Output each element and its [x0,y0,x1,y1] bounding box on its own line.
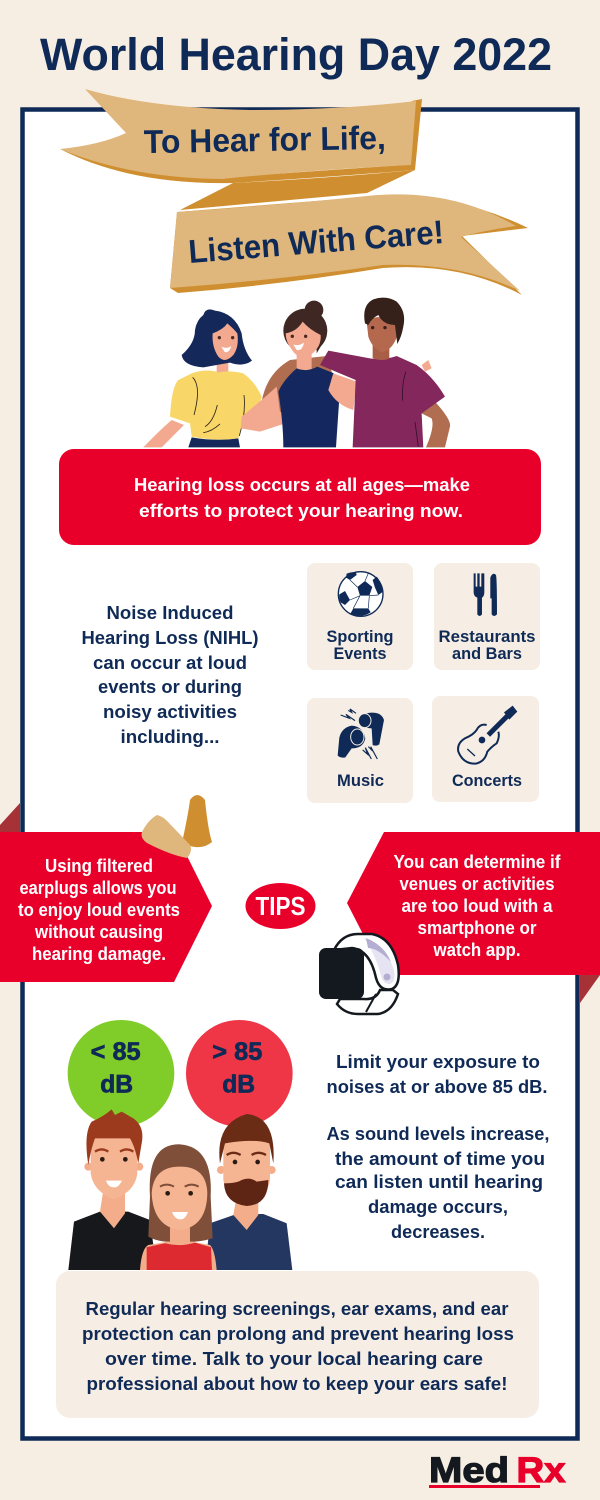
icon: earbuds [338,709,384,759]
bottom advice panel: professional about how to keep your ears safe! [86,1374,508,1394]
badge: over 85 dB [186,1020,293,1127]
ribbon banner [60,89,528,295]
right tip panel: are too loud with a [402,896,553,916]
red message banner: Hearing loss occurs at all ages—make [134,475,470,495]
person: right man [205,1114,292,1270]
text: limit exposure: can listen until hearing [335,1172,543,1192]
person: left man [68,1109,157,1270]
text: limit exposure: damage occurs, [368,1197,508,1217]
card: sporting events [307,563,413,670]
label: Sporting [326,628,394,646]
red message banner [59,449,541,545]
card: restaurants and bars [434,563,540,670]
bottom advice panel [56,1271,539,1418]
icon: soccer ball [338,572,383,616]
left tip panel: without causing [34,922,163,942]
left tip panel: Using filtered [45,856,153,876]
text: limit exposure: noises at or above 85 dB. [326,1077,548,1097]
icon: guitar [458,706,517,764]
right tip panel: watch app. [433,940,520,960]
NIHL text block: Noise Induced [106,603,234,623]
left tip panel [0,832,212,982]
badge: over 85 dB: dB [222,1071,255,1098]
illustration: three friends [143,298,450,447]
right tip panel: You can determine if [394,852,561,872]
title: World Hearing Day 2022 [40,29,552,80]
text: limit exposure: the amount of time you [335,1149,545,1169]
red message banner: efforts to protect your hearing now. [139,501,463,521]
tips badge: TIPS [256,891,306,921]
badge: under 85 dB: dB [100,1071,133,1098]
text: limit exposure: Limit your exposure to [336,1052,540,1072]
left tip panel: hearing damage. [32,944,166,964]
right tip panel: venues or activities [400,874,554,894]
icon: smartwatch [319,934,399,1014]
card: sporting events: Events [334,645,386,663]
ribbon text line 2: Listen With Care! [187,213,445,270]
badge: over 85 dB: > 85 [212,1039,263,1066]
tips badge [246,883,316,929]
logo: MedRx [429,1451,566,1490]
left tip panel: to enjoy loud events [18,900,180,920]
dark red ribbon folds [0,803,600,1003]
text: limit exposure: As sound levels increase, [326,1124,550,1144]
badge: under 85 dB: < 85 [91,1039,141,1066]
bottom advice panel: protection can prolong and prevent hearing loss [82,1324,514,1344]
NIHL text block: Hearing Loss (NIHL) [82,628,259,648]
text: limit exposure [326,1052,550,1242]
sound level illustration: three people [68,1020,293,1270]
card: music [307,698,413,803]
bottom advice panel: Regular hearing screenings, ear exams, and ear [86,1299,508,1319]
right tip panel: smartphone or [418,918,536,938]
ribbon text line 1: To Hear for Life, [143,119,386,160]
NIHL text block: events or during [98,677,242,697]
label: Music [337,772,384,790]
label: Restaurants [438,628,536,646]
logo: MedRx: Med [429,1451,509,1490]
NIHL text block [82,603,259,747]
right tip panel [347,832,600,975]
left tip panel: earplugs allows you [20,878,176,898]
NIHL text block: can occur at loud [93,653,247,673]
text: limit exposure: decreases. [391,1222,485,1242]
person: centre woman [140,1144,217,1270]
label: Concerts [452,772,522,790]
icon: fork and knife [474,573,497,616]
logo: MedRx: Rx [516,1451,566,1490]
icon: earplugs [142,795,212,858]
bottom advice panel: over time. Talk to your local hearing care [105,1349,483,1369]
badge: under 85 dB [68,1020,174,1127]
NIHL text block: noisy activities [103,702,237,722]
card: concerts [432,696,539,802]
NIHL text block: including... [120,727,220,747]
card: restaurants and bars: and Bars [452,645,522,663]
